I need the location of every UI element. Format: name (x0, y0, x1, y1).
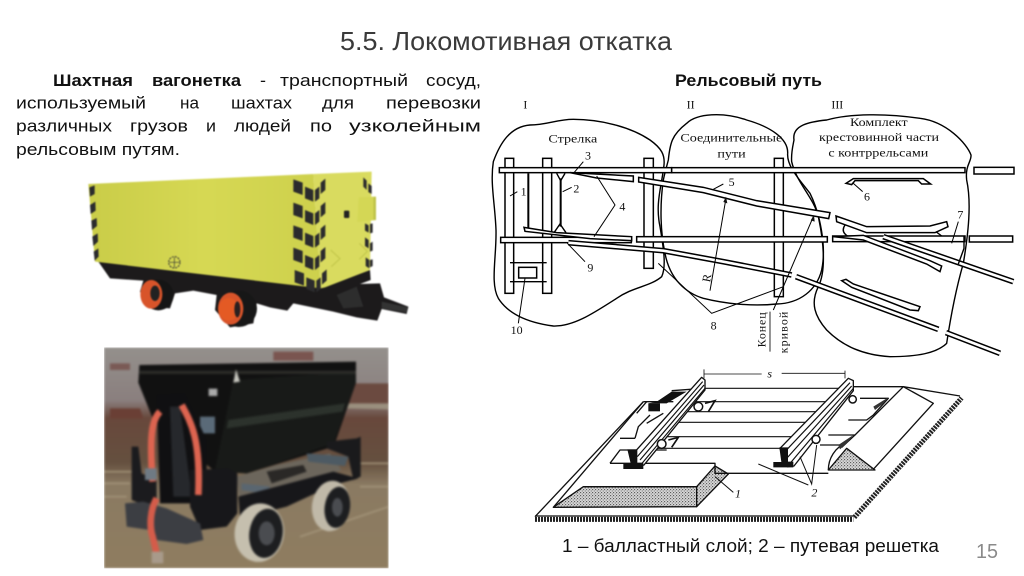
title: 5.5. Локомотивная откатка (340, 26, 673, 56)
track layout diagram: Соединительные (680, 131, 782, 145)
text block: definition of mine car: шахтах (231, 94, 293, 112)
text block: definition of mine car: рельсовым путям. (16, 140, 180, 159)
track layout diagram: с контррельсами (828, 146, 929, 160)
leader lines (715, 445, 817, 492)
hopper (138, 362, 356, 473)
outer sleeper ends left (620, 402, 663, 438)
text block: definition of mine car: перевозки (386, 94, 481, 112)
track cross-section diagram: 1 (735, 486, 741, 500)
zone outlines (492, 119, 664, 326)
front sleeper edge (583, 443, 847, 487)
front wheel (220, 290, 257, 327)
text block: definition of mine car: используемый (16, 94, 146, 112)
rear wheel (143, 280, 174, 310)
track layout diagram (492, 97, 1014, 357)
outer sleeper ends right (820, 398, 888, 447)
ground edges (535, 387, 960, 517)
callout labels: 2 (811, 486, 817, 500)
connecting curves (639, 177, 830, 219)
track layout diagram: 8 (711, 318, 717, 332)
labels: I (523, 97, 527, 111)
tie rod and switch (528, 173, 561, 230)
right rail (780, 378, 853, 467)
sleepers (505, 158, 514, 293)
text block: definition of mine car: транспортный (280, 71, 408, 90)
text block: definition of mine car: вагонетка (152, 71, 242, 90)
image: yellow mine car (88, 172, 408, 327)
track layout diagram: 6 (864, 190, 870, 204)
track layout diagram: Конец (754, 312, 768, 347)
track layout diagram: 10 (511, 323, 523, 337)
track layout diagram: III (831, 97, 843, 111)
straight rails (499, 168, 672, 173)
dimension s (704, 369, 845, 378)
text block: definition of mine car: для (322, 94, 354, 112)
corner chevrons (293, 179, 325, 202)
track layout diagram: 2 (573, 182, 579, 196)
left rail (635, 377, 705, 467)
left edge stripes (89, 185, 99, 261)
rail fasteners (694, 402, 703, 411)
text block: definition of mine car: узколейным (349, 116, 481, 136)
page number: 15 (976, 541, 998, 563)
frame floor (237, 453, 342, 505)
text block: definition of mine car: грузов (130, 116, 188, 136)
side rail (238, 472, 358, 518)
track layout diagram: 3 (585, 148, 591, 162)
side hatch (357, 197, 376, 222)
track layout diagram: 9 (587, 261, 593, 275)
text block: definition of mine car: по (310, 116, 332, 136)
track layout diagram: 4 (619, 200, 625, 214)
orange straps (151, 412, 160, 482)
body right side (313, 172, 372, 288)
image: photo of tipping mine car (104, 347, 389, 568)
ballast edges (553, 387, 933, 507)
bumper (125, 502, 203, 544)
text block: definition of mine car: людей (234, 116, 291, 136)
ground hatching (535, 512, 853, 527)
column and front frame (157, 393, 207, 503)
track layout diagram: Стрелка (548, 131, 598, 145)
track layout diagram: Комплект (850, 115, 909, 129)
heading: rail track: Рельсовый путь (675, 71, 822, 90)
track layout diagram: 1 (521, 184, 527, 198)
body left side (88, 174, 321, 288)
track layout diagram: 7 (957, 207, 963, 221)
sleepers between rails (658, 388, 839, 448)
right edge stripes (363, 177, 373, 268)
backdrop wall and floor (104, 347, 389, 568)
track layout diagram: 5 (729, 175, 735, 189)
text block: definition of mine car: на (180, 94, 200, 112)
ballast front (553, 487, 697, 507)
track layout diagram: кривой (777, 311, 791, 353)
text block: definition of mine car: сосуд, (426, 71, 481, 90)
text block: definition of mine car: и (206, 116, 216, 136)
front wheel (231, 500, 288, 565)
leader lines (510, 162, 958, 323)
points box (510, 263, 547, 282)
track cross-section diagram (535, 366, 962, 519)
frog (836, 216, 948, 233)
track layout diagram: пути (717, 146, 746, 160)
track layout diagram: крестовинной части (819, 130, 940, 144)
text block: definition of mine car: различных (16, 116, 113, 136)
text block: definition of mine car: Шахтная (53, 71, 133, 90)
track cross-section diagram: s (767, 366, 772, 380)
track layout diagram: R (699, 273, 714, 283)
rear wheel (309, 478, 353, 534)
guard rails (846, 179, 931, 185)
track layout diagram: II (687, 97, 695, 111)
text block: definition of mine car (16, 71, 481, 159)
chassis (98, 262, 408, 327)
rail profiles (623, 449, 643, 469)
caption: 1 – балластный слой; 2 – путевая решетка (562, 536, 940, 556)
text block: definition of mine car: - (260, 71, 266, 90)
